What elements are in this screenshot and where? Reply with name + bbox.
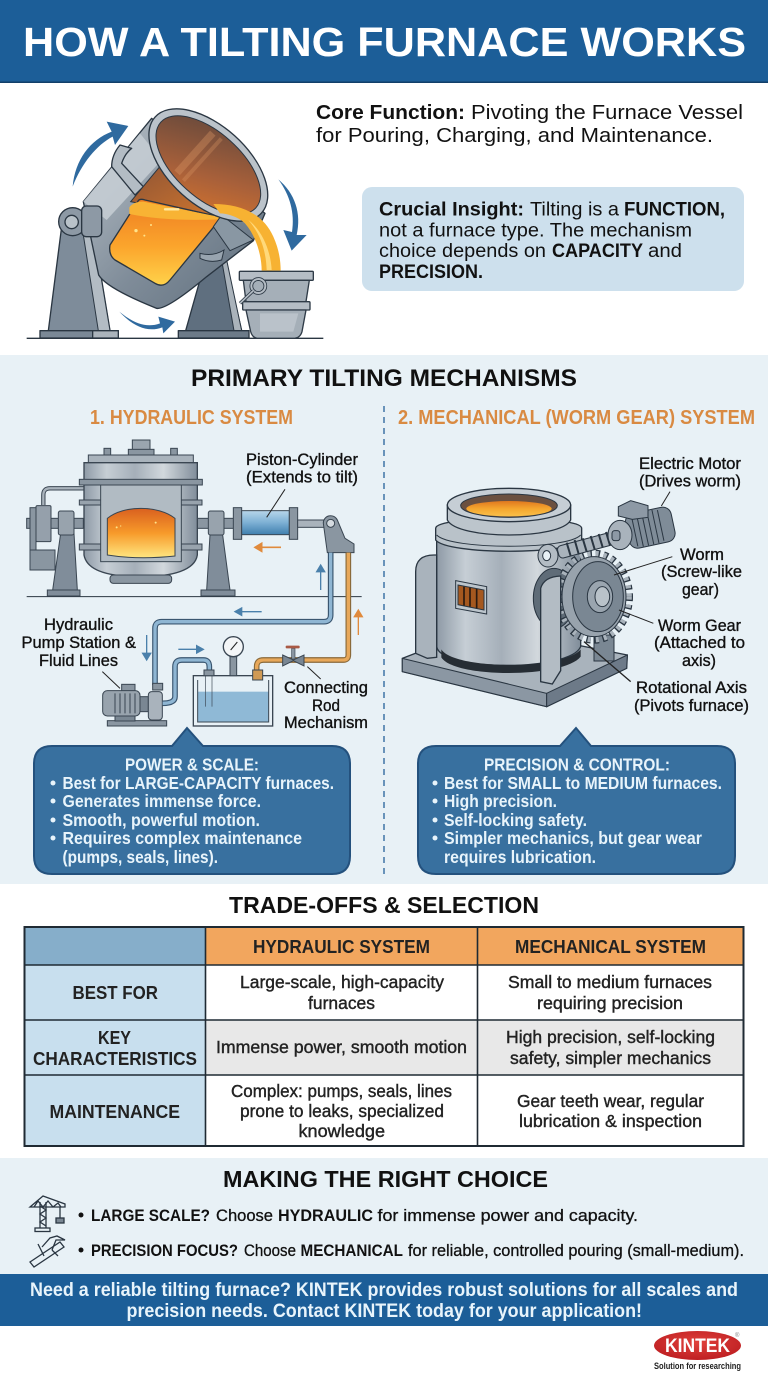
cell: mechanical maintenance: lubrication & inspection — [519, 1111, 702, 1131]
label: hydraulic pump station: Hydraulic — [44, 616, 113, 634]
cell: hydraulic characteristics: Immense power, smooth motion — [216, 1037, 467, 1057]
callout: power and scale: Generates immense force. — [62, 791, 261, 811]
panel: making the right choice — [0, 1158, 768, 1274]
row label: key characteristics: KEY — [98, 1028, 131, 1048]
row label: best for: BEST FOR — [72, 983, 158, 1003]
logo: kintek: Solution for researching — [654, 1361, 741, 1371]
callout: power and scale: (pumps, seals, lines). — [62, 847, 218, 867]
cell: hydraulic best for: furnaces — [308, 993, 375, 1013]
choice: precision focus: MECHANICAL — [300, 1241, 403, 1260]
label: hydraulic pump station — [22, 616, 136, 670]
label: worm — [661, 546, 742, 599]
callout: power and scale: POWER & SCALE: — [125, 754, 259, 774]
panel: primary tilting mechanisms — [0, 355, 768, 884]
icon: electric motor — [608, 501, 677, 550]
arrow: rotation — [119, 312, 175, 333]
choice: precision focus — [78, 1241, 744, 1260]
arrow: orange up — [354, 610, 362, 635]
banner: call to action — [0, 1274, 768, 1326]
callout: precision and control: PRECISION & CONTROL: — [484, 754, 670, 774]
callout: crucial insight: Crucial Insight: — [379, 200, 524, 220]
arrow: blue left — [235, 608, 262, 615]
callout: power and scale: Best for LARGE-CAPACITY furnaces. — [62, 773, 334, 793]
choice: large scale — [78, 1206, 638, 1225]
icon: hydraulic pump — [103, 683, 167, 726]
illustration: tilting furnace pouring into a bucket — [27, 88, 323, 338]
label: worm: (Screw-like — [661, 563, 742, 581]
title: HOW A TILTING FURNACE WORKS — [23, 19, 746, 65]
cell: hydraulic best for — [240, 972, 444, 1013]
label: piston-cylinder — [246, 451, 359, 486]
logo: kintek — [654, 1331, 741, 1371]
icon: vent window — [456, 581, 487, 614]
choice: precision focus: PRECISION FOCUS? — [91, 1241, 238, 1260]
label: worm gear — [654, 617, 745, 670]
banner: call to action: precision needs. Contact KINTEK today for your application! — [126, 1301, 642, 1322]
callout: power and scale: Smooth, powerful motion. — [62, 810, 260, 830]
label: hydraulic pump station: Fluid Lines — [39, 652, 118, 670]
cell: mechanical characteristics: safety, simpler mechanics — [510, 1048, 711, 1068]
arrow: blue right — [178, 646, 203, 653]
label: electric motor: (Drives worm) — [639, 472, 741, 490]
label: worm gear: Worm Gear — [658, 617, 741, 635]
cell: hydraulic maintenance: knowledge — [298, 1121, 385, 1141]
label: worm gear: axis) — [682, 652, 716, 670]
callout: crucial insight: choice depends on — [379, 241, 546, 262]
cell: hydraulic maintenance: prone to leaks, specialized — [240, 1101, 444, 1121]
heading: primary tilting mechanisms: PRIMARY TILTING MECHANISMS — [191, 365, 577, 392]
choice: precision focus: Choose — [244, 1241, 296, 1260]
cell: mechanical characteristics — [506, 1027, 715, 1068]
callout: crucial insight: and — [648, 241, 682, 262]
row label: maintenance: MAINTENANCE — [50, 1102, 180, 1122]
cell: hydraulic maintenance: Complex: pumps, seals, lines — [231, 1081, 452, 1101]
callout: precision and control: Self-locking safety. — [444, 810, 587, 830]
callout: crucial insight — [362, 187, 744, 291]
column header: hydraulic: HYDRAULIC SYSTEM — [253, 937, 430, 957]
icon: valve — [283, 646, 304, 666]
choice: large scale: LARGE SCALE? — [91, 1206, 210, 1225]
cell: mechanical maintenance: Gear teeth wear, regular — [517, 1091, 704, 1111]
label: connecting rod — [284, 679, 368, 732]
callout: crucial insight: Tilting is a — [530, 200, 619, 220]
choice: large scale: HYDRAULIC — [278, 1206, 373, 1225]
label: electric motor — [639, 455, 742, 490]
illustration: worm gear furnace — [402, 488, 677, 707]
label: connecting rod: Connecting — [284, 679, 368, 697]
core function text: for Pouring, Charging, and Maintenance. — [316, 125, 713, 147]
label: connecting rod: Mechanism — [284, 714, 368, 732]
label: piston-cylinder: (Extends to tilt) — [246, 468, 358, 486]
cell: hydraulic best for: Large-scale, high-capacity — [240, 972, 444, 992]
callout: crucial insight: FUNCTION, — [624, 200, 725, 220]
label: rotational axis: Rotational Axis — [636, 679, 747, 697]
label: piston-cylinder: Piston-Cylinder — [246, 451, 359, 469]
callout: precision and control: requires lubrication. — [444, 847, 596, 867]
icon: pressure gauge — [223, 637, 243, 676]
table: comparison — [24, 927, 744, 1146]
banner: call to action: Need a reliable tilting furnace? KINTEK provides robust solutions for all scales and — [30, 1280, 738, 1301]
arrow: tilt down — [278, 179, 307, 251]
label: electric motor: Electric Motor — [639, 455, 742, 473]
label: worm: Worm — [680, 546, 724, 564]
cell: mechanical maintenance — [517, 1091, 704, 1131]
arrow: orange left — [255, 543, 281, 551]
icon: worm gear — [559, 554, 629, 639]
cell: mechanical best for: Small to medium furnaces — [508, 972, 712, 992]
callout: precision and control: Simpler mechanics, but gear wear — [444, 828, 702, 848]
heading: trade-offs and selection: TRADE-OFFS & SELECTION — [229, 892, 539, 918]
column header: mechanical: MECHANICAL SYSTEM — [515, 937, 706, 957]
row label: key characteristics — [33, 1028, 197, 1069]
illustration: hydraulic furnace — [27, 440, 362, 726]
icon: caliper — [30, 1236, 65, 1267]
label: connecting rod: Rod — [312, 697, 340, 715]
logo: kintek: ® — [735, 1332, 740, 1339]
label: rotational axis: (Pivots furnace) — [634, 697, 749, 715]
icon: crane — [30, 1196, 65, 1232]
callout: crucial insight: PRECISION. — [379, 262, 483, 283]
callout: precision and control: Best for SMALL to MEDIUM furnaces. — [444, 773, 722, 793]
label: hydraulic pump station: Pump Station & — [22, 634, 136, 652]
label: rotational axis — [634, 679, 749, 715]
label: worm: gear) — [682, 581, 719, 599]
core function text: Pivoting the Furnace Vessel — [471, 102, 743, 124]
label: worm gear: (Attached to — [654, 634, 745, 652]
choice: precision focus: for reliable, controlled pouring (small-medium). — [408, 1241, 744, 1260]
callout: power and scale: Requires complex maintenance — [62, 828, 302, 848]
arrow: blue down — [143, 635, 151, 660]
arrow: blue up — [317, 565, 325, 590]
cell: mechanical characteristics: High precision, self-locking — [506, 1027, 715, 1047]
core function text: Core Function: — [316, 102, 465, 124]
core function text — [316, 102, 743, 147]
cell: mechanical best for: requiring precision — [537, 993, 683, 1013]
cell: mechanical best for — [508, 972, 712, 1013]
heading: making the right choice: MAKING THE RIGHT CHOICE — [223, 1166, 548, 1192]
row label: key characteristics: CHARACTERISTICS — [33, 1049, 197, 1069]
callout: crucial insight: CAPACITY — [552, 241, 643, 262]
icon: worm screw — [538, 531, 618, 567]
cell: hydraulic maintenance — [231, 1081, 452, 1141]
heading: hydraulic system: 1. HYDRAULIC SYSTEM — [90, 407, 293, 429]
callout: precision and control: High precision. — [444, 791, 557, 811]
callout: power and scale — [34, 728, 350, 874]
callout: precision and control — [418, 728, 735, 874]
logo: kintek: KINTEK — [665, 1336, 730, 1357]
callout: crucial insight: not a furnace type. The mechanism — [379, 220, 692, 242]
icon: fluid tank — [193, 670, 273, 726]
choice: large scale: for immense power and capacity. — [378, 1206, 638, 1225]
choice: large scale: Choose — [216, 1206, 273, 1225]
arrow: tilt up — [73, 122, 128, 187]
header banner — [0, 0, 768, 83]
